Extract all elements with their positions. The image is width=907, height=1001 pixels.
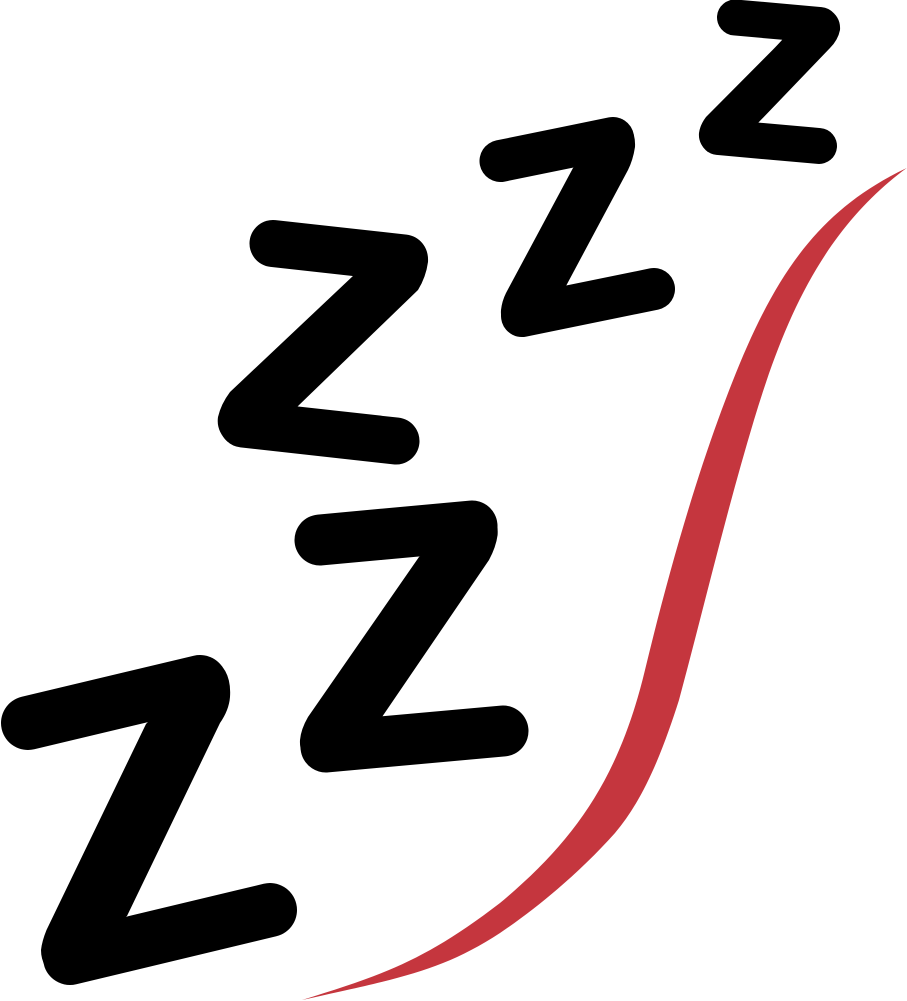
icon: red swoosh (302, 168, 907, 1000)
letter Z, upper middle: Z (481, 69, 657, 384)
letter Z, lower middle: Z (299, 437, 503, 834)
letter Z, upper left: Z (205, 167, 445, 514)
